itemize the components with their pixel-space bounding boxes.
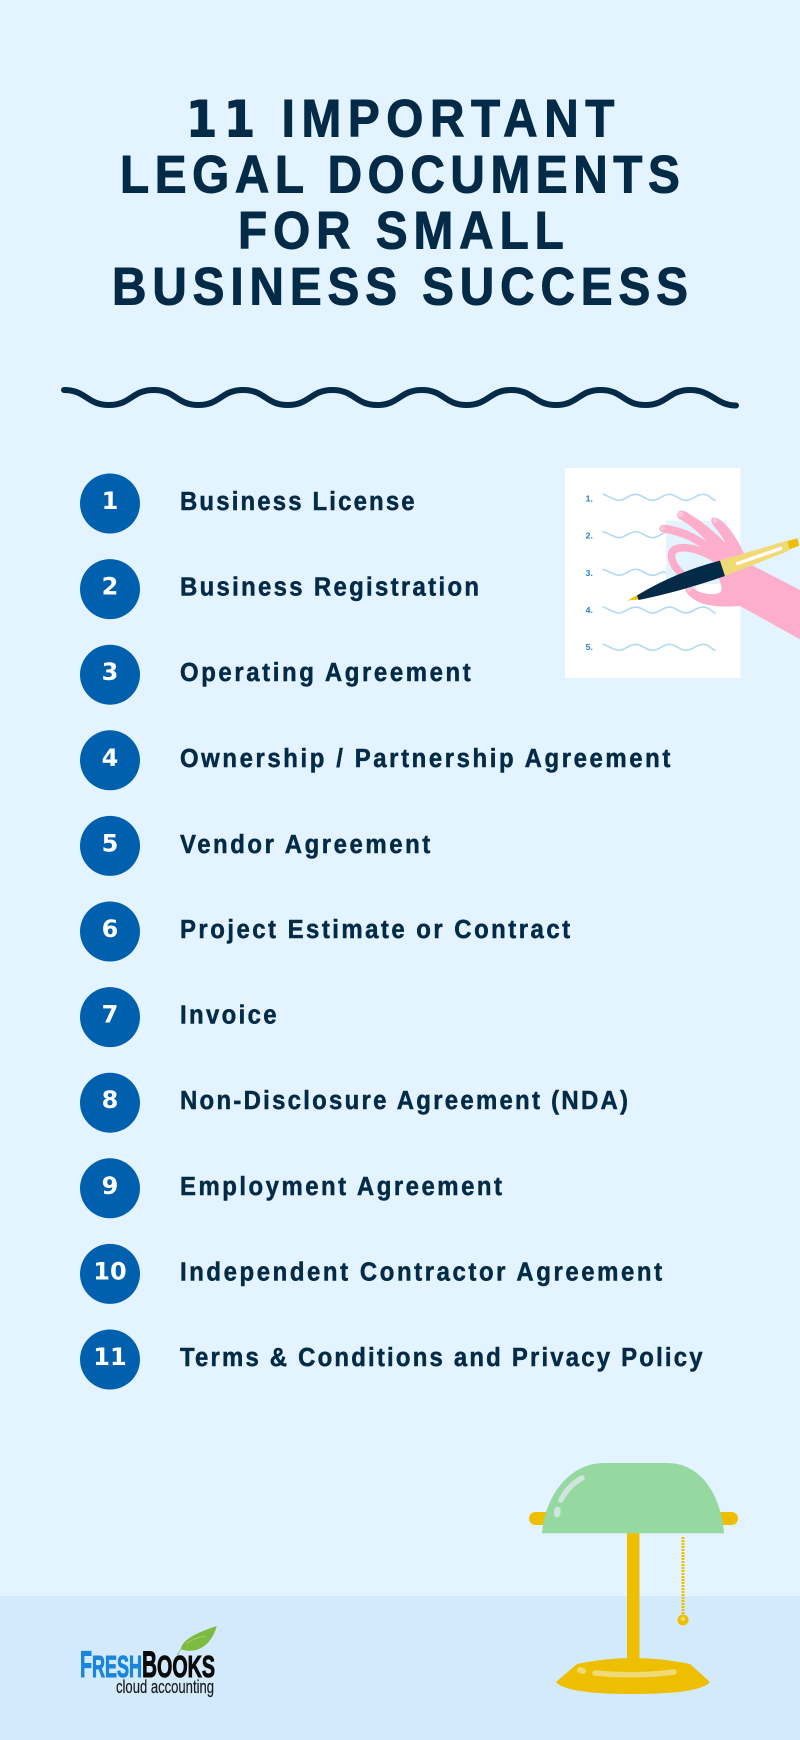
wavy divider [64, 390, 736, 406]
list numbers: 2. [586, 531, 593, 541]
logo wordmark: B [142, 1644, 157, 1685]
item 3 [80, 645, 471, 705]
list numbers: 4. [586, 605, 593, 615]
item 7: 7 [102, 1001, 118, 1029]
logo wordmark: F [80, 1644, 92, 1685]
illustration: checklist with hand and pen [565, 468, 800, 678]
list numbers: 1. [586, 494, 593, 504]
item 1 [80, 474, 415, 534]
item 9: Employment Agreement [180, 1172, 503, 1201]
base highlights [580, 1670, 674, 1675]
pale square behind hand [666, 521, 727, 584]
item 7 [80, 987, 277, 1047]
title: BUSINESS SUCCESS [112, 256, 688, 316]
lamp stem [627, 1530, 640, 1665]
item 11: 11 [93, 1343, 127, 1371]
title: FOR SMALL [238, 200, 564, 260]
item 5: 5 [102, 829, 118, 857]
item 1: 1 [102, 487, 118, 515]
item 6: 6 [102, 915, 118, 943]
item 9: 9 [102, 1172, 118, 1200]
item 11 [80, 1330, 703, 1390]
item 4: Ownership / Partnership Agreement [180, 744, 671, 773]
item 11: Terms & Conditions and Privacy Policy [180, 1343, 703, 1372]
item 8: Non-Disclosure Agreement (NDA) [180, 1086, 628, 1115]
item 8 [80, 1073, 628, 1133]
logo tagline: cloud accounting [116, 1677, 214, 1697]
lamp base [556, 1658, 710, 1694]
item 7: Invoice [180, 1001, 277, 1030]
shade highlights [557, 1478, 582, 1514]
list numbers [586, 494, 593, 652]
logo leaf [177, 1626, 217, 1655]
item 5: Vendor Agreement [180, 830, 431, 859]
item 8: 8 [102, 1086, 118, 1114]
item 10 [80, 1244, 663, 1304]
lamp shade [542, 1463, 724, 1533]
logo wordmark: OOKS [157, 1649, 215, 1684]
item 2 [80, 559, 479, 619]
document sheet [565, 468, 740, 678]
list numbers: 3. [586, 568, 593, 578]
item 10: Independent Contractor Agreement [180, 1258, 663, 1287]
list wavy lines [603, 494, 715, 650]
hand and arm [659, 511, 800, 639]
item 9 [80, 1158, 503, 1218]
pen [627, 538, 799, 601]
item 6: Project Estimate or Contract [180, 915, 571, 944]
illustration: desk lamp [529, 1463, 738, 1694]
item 2: 2 [102, 573, 118, 601]
item 4: 4 [102, 744, 118, 772]
item 6 [80, 902, 571, 962]
logo wordmark [80, 1644, 215, 1685]
title [112, 88, 688, 316]
pull chain [678, 1537, 688, 1626]
item 4 [80, 730, 671, 790]
logo: FreshBooks [80, 1626, 217, 1697]
item 2: Business Registration [180, 573, 479, 602]
lamp side knobs [529, 1512, 738, 1525]
item 1: Business License [180, 487, 415, 516]
logo wordmark: RESH [92, 1649, 142, 1684]
item 10: 10 [93, 1257, 127, 1285]
title: 11 IMPORTANT [186, 88, 615, 149]
item 5 [80, 816, 431, 876]
item 3: 3 [102, 658, 118, 686]
numbered list [80, 474, 703, 1390]
list numbers: 5. [586, 642, 593, 652]
title: LEGAL DOCUMENTS [120, 144, 680, 204]
item 3: Operating Agreement [180, 658, 471, 687]
